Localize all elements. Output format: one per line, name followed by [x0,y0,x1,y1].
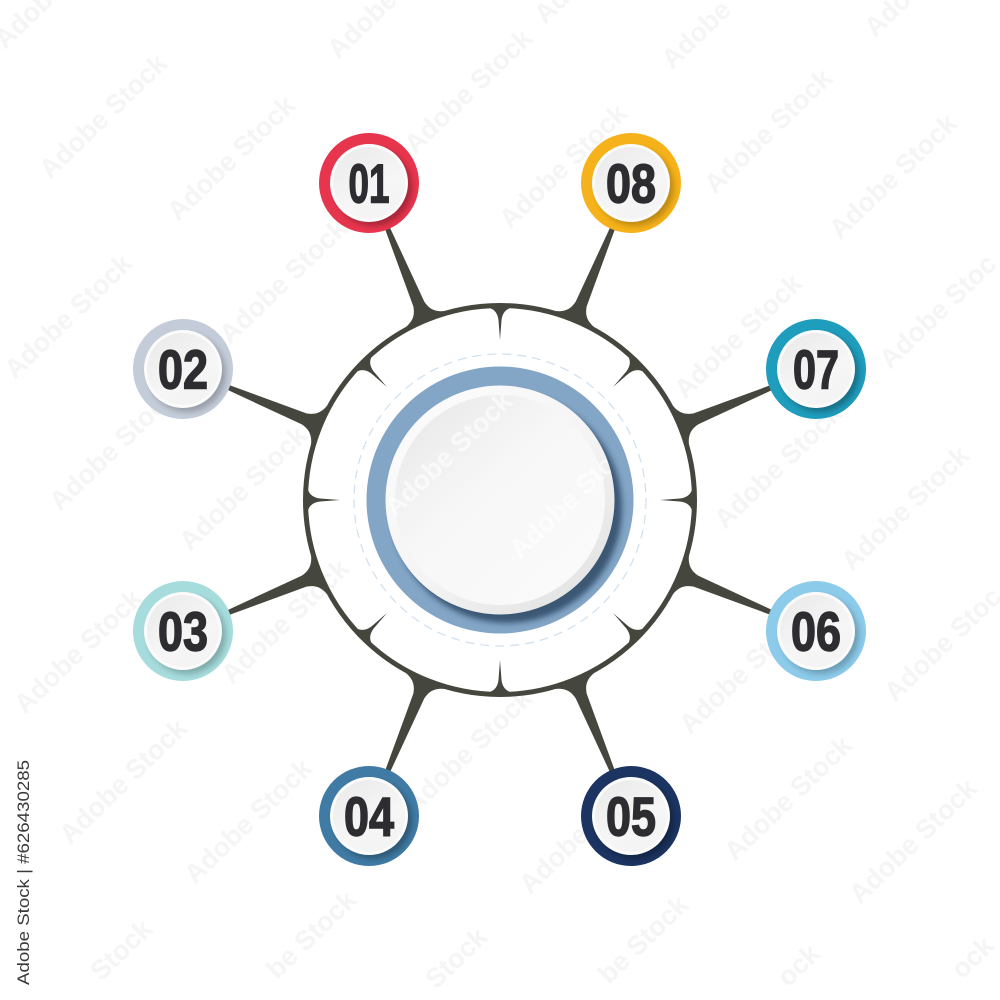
badge 04: 04 [344,786,394,848]
badge 02: 02 [158,338,208,400]
connector: 05 [548,667,639,783]
connector: 02 [217,361,333,452]
watermark pattern: Adobe Stock [178,752,319,889]
inner spikes [304,304,696,696]
watermark pattern: Adobe Stock [53,712,194,849]
watermark pattern: Adobe Stock [8,582,149,719]
watermark pattern: Adobe Stock [0,247,139,384]
central hub [304,304,696,696]
watermark pattern: ock [945,930,1000,984]
watermark pattern: Adobe Stock [843,772,984,909]
watermark pattern: Adobe Stock [213,212,354,349]
watermark pattern: Adobe Stock [673,602,814,739]
watermark pattern: ock [771,938,826,992]
watermark pattern: Stock [419,921,494,994]
watermark pattern: Adobe Stock [493,97,634,234]
badge 05 [581,766,681,866]
watermark pattern: Adobe Stoc [873,249,1000,374]
watermark pattern: Adobe Stock [173,419,314,556]
watermark pattern: be Stock [592,889,695,989]
badge 03 [133,581,233,681]
dashed ring [354,354,646,646]
watermark pattern: Adobe Stock [668,267,809,404]
disk watermarks: Adobe Stock [503,427,644,564]
watermark pattern: Adobe Stock [698,62,839,199]
watermark pattern: Adobe Stock [33,47,174,184]
connector: 01 [361,217,452,333]
watermark pattern: Adobe Stock [43,379,184,516]
badge 01: 01 [348,152,390,214]
badge 07: 07 [793,338,839,400]
disk watermarks: Adobe Stock [378,385,519,522]
connector ring [306,306,694,694]
badge 01 [319,133,419,233]
badge 02 [133,319,233,419]
watermark pattern: Adobe Stock [215,552,356,689]
connector: 07 [667,361,783,452]
stock id side text: Adobe Stock | #626430285 [14,760,33,985]
watermark pattern: Adobe Stock [161,89,302,226]
watermark pattern: Adobe Stock [823,107,964,244]
watermark pattern: Adobe Stock [718,729,859,866]
connector: 04 [361,667,452,783]
badge 07 [766,319,866,419]
badge 06: 06 [791,600,841,662]
badge 08: 08 [606,152,656,214]
connector: 08 [548,217,639,333]
disk face [395,395,605,605]
badge 06 [766,581,866,681]
connector: 06 [667,548,783,639]
watermark pattern: Stock [84,913,159,986]
watermark pattern: Adobe Stock [398,682,539,819]
disk shadow [392,393,622,623]
watermark pattern: Adobe Stock [835,439,976,576]
badge 04 [319,766,419,866]
disk watermarks [395,395,610,500]
watermark pattern: Adobe Stock [708,397,849,534]
badge 03: 03 [158,600,208,662]
badge 08 [581,133,681,233]
watermark pattern: Adobe Stock [398,22,539,159]
watermark pattern: Adobe Stock [513,762,654,899]
badge 05: 05 [606,786,656,848]
watermark pattern: be Stock [260,884,363,984]
connector: 03 [217,548,333,639]
white disk [386,386,614,614]
blue ring [366,366,634,634]
